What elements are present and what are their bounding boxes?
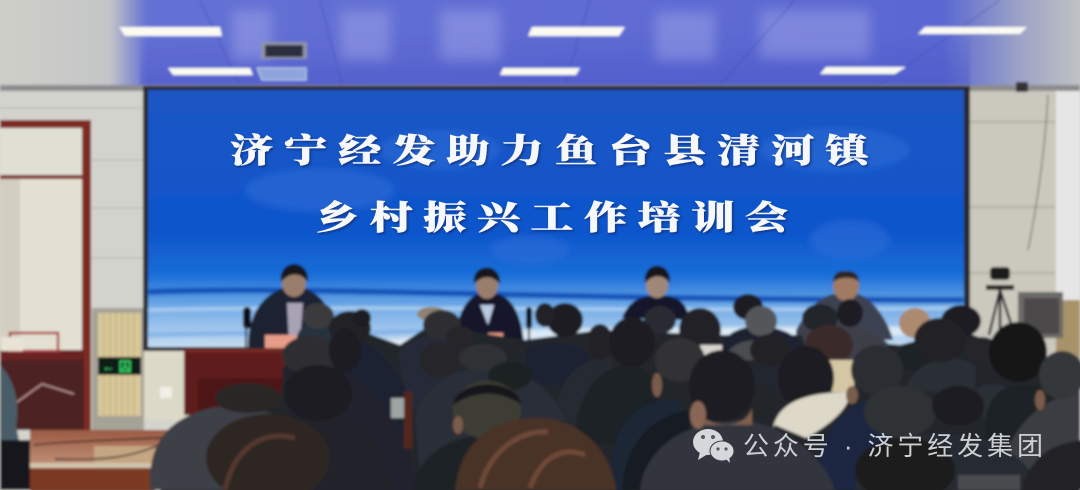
right wall [966, 82, 1080, 431]
exit sign panel: ← 囚 [102, 359, 132, 374]
icon: wechat watermark [693, 429, 734, 463]
left wall and door [0, 91, 148, 431]
audience: front left group [150, 328, 415, 490]
water bottle [391, 392, 412, 448]
speaker four [796, 271, 893, 340]
ceiling vent and projector [257, 42, 307, 80]
screen wave highlights [148, 290, 964, 347]
speaker three [622, 266, 689, 320]
podium [184, 349, 524, 415]
speaker two [455, 268, 524, 345]
wall control box [1018, 292, 1063, 338]
stage floor [30, 430, 180, 490]
audience: dark crowd mass [160, 325, 1080, 490]
screen title line one: 济宁经发助力鱼台县清河镇 [230, 133, 875, 170]
audience: front centre group [412, 381, 616, 490]
audience: back rows [296, 294, 999, 470]
audience: front rows [610, 338, 1080, 490]
speaker one [248, 264, 334, 347]
watermark text: 公众号 · 济宁经发集团 [743, 431, 1043, 461]
ceiling [0, 0, 1080, 91]
LED screen [143, 86, 970, 351]
ceiling lights [119, 27, 1027, 75]
screen title line two: 乡村振兴工作培训会 [316, 199, 789, 237]
camera on tripod [986, 267, 1014, 335]
screen dotted map texture [245, 128, 910, 264]
exit sign panel [92, 308, 144, 430]
left edge attendee [0, 365, 30, 490]
name cards and microphones [243, 307, 532, 348]
audience: middle rows centre [415, 317, 1047, 470]
lower wall with outlet [144, 350, 189, 420]
